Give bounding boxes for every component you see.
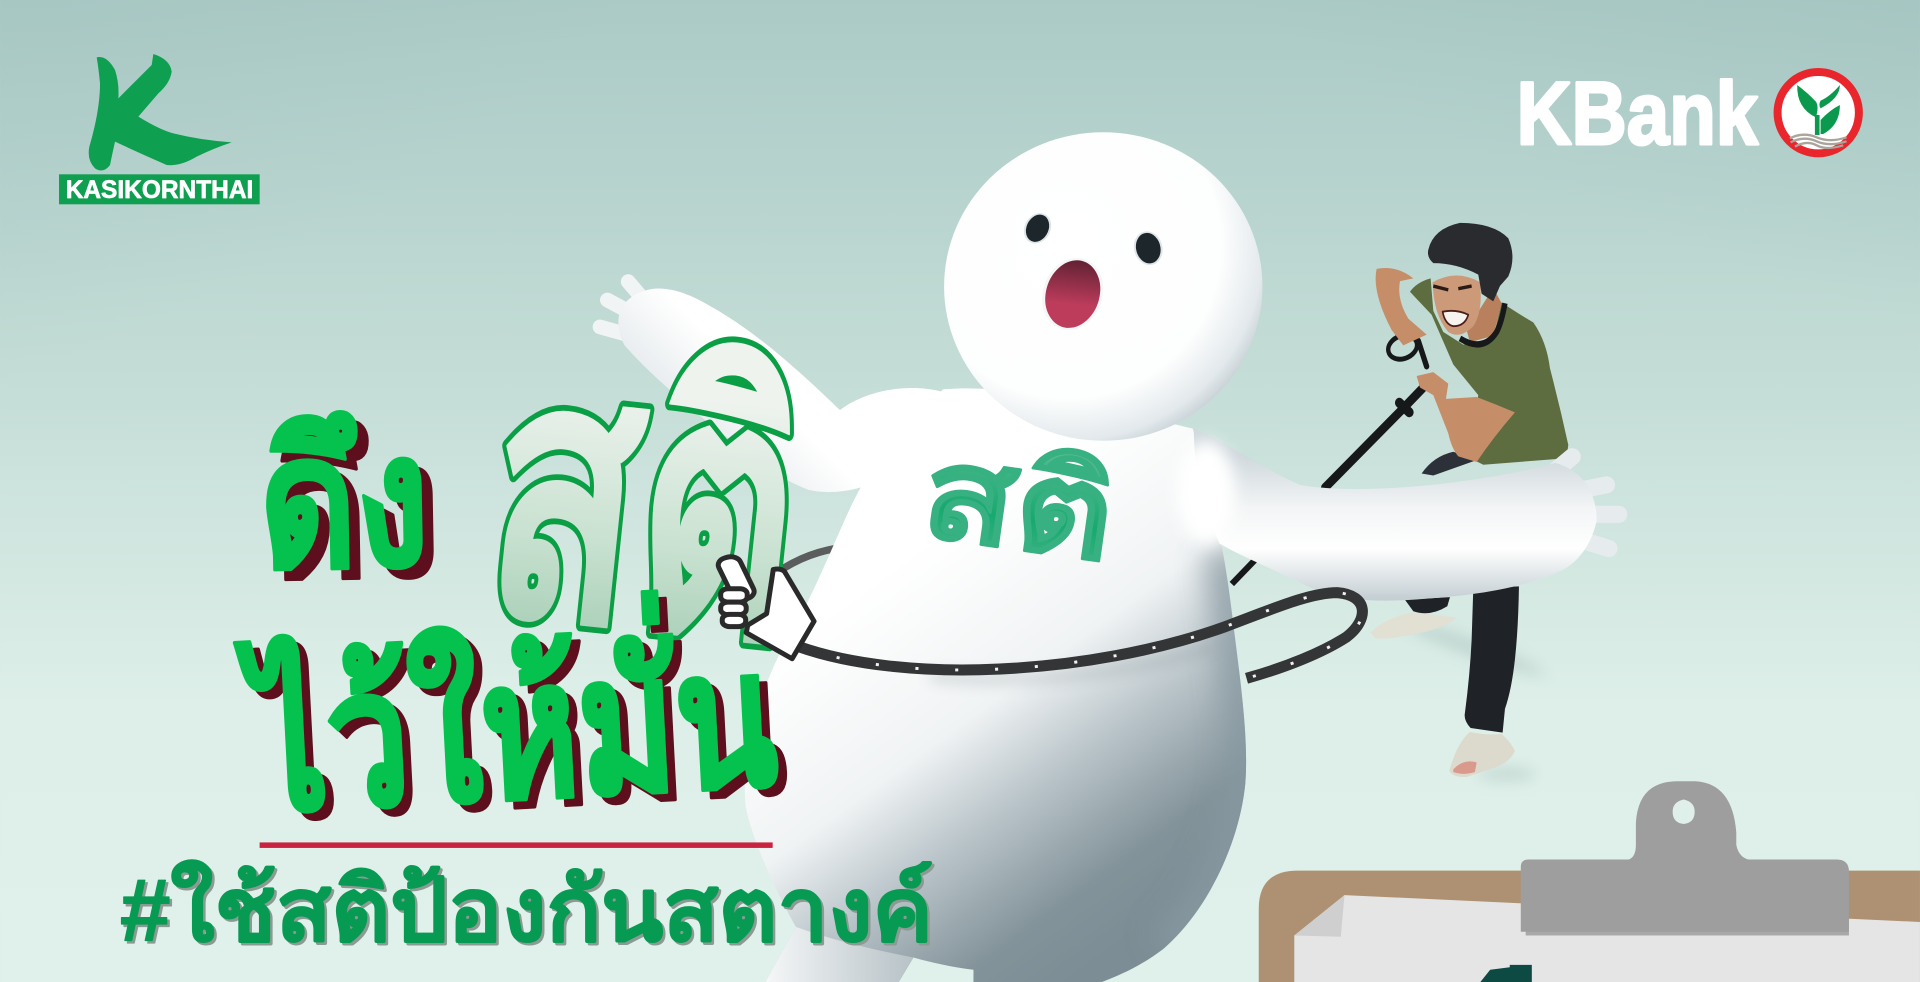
mascot: left leg — [765, 927, 913, 982]
man: shirt — [1410, 278, 1568, 465]
headline word: glossy สติ: สติ — [472, 290, 818, 716]
clipboard: clip shadow — [1526, 906, 1849, 935]
mascot: right eye — [1133, 231, 1164, 265]
logo: Kasikornthai: KASIKORNTHAI — [66, 177, 253, 204]
man: front slipper — [1449, 732, 1515, 777]
man: back slipper — [1371, 612, 1457, 639]
man: trousers — [1405, 452, 1519, 733]
mascot: shoulder highlight — [1177, 441, 1235, 544]
mascot: right arm — [1194, 429, 1597, 601]
man: arms — [1376, 268, 1515, 462]
man: collar — [1460, 303, 1505, 344]
man: hair — [1428, 223, 1512, 301]
man: toes — [1453, 761, 1477, 774]
headline word: ไว้ให้มั่น: ไว้ให้มั่น — [241, 593, 790, 860]
hand: palm and cuff — [746, 569, 814, 659]
hashtag: #ใช้สติป้องกันสตางค์ — [120, 859, 933, 959]
shadow under waist rope — [931, 647, 1212, 679]
mascot: left arm — [600, 282, 943, 492]
headline word: ดึง: ดึง — [258, 398, 430, 606]
rope around mascot waist — [798, 593, 1362, 678]
mascot: right hand fingers — [1550, 457, 1619, 549]
headline word: glossy สติ: สติ — [472, 290, 818, 716]
man: rope in hands — [1325, 332, 1430, 488]
logo: Kasikornthai — [59, 54, 260, 204]
clipboard: folded corner — [1294, 895, 1344, 937]
man: teeth — [1443, 311, 1468, 326]
clipboard: metal clip — [1521, 781, 1849, 932]
man: neck — [1467, 288, 1502, 342]
mascot: face — [1022, 212, 1164, 332]
clipboard: paper — [1294, 895, 1920, 982]
hand: fingers — [715, 555, 757, 627]
mascot: left eye — [1022, 212, 1054, 244]
logo: KBank: KBank — [1517, 63, 1759, 163]
clipboard: cut-off heading fragment — [1480, 965, 1532, 982]
mascot: body — [745, 388, 1248, 982]
mascot — [600, 132, 1619, 982]
rope behind mascot body — [776, 547, 1261, 584]
mascot: chest word: สติ — [914, 420, 1124, 588]
headline word: glossy สติ — [472, 290, 818, 716]
man: eyes — [1433, 286, 1472, 290]
clipboard: board — [1259, 871, 1920, 982]
mascot: mouth — [1038, 256, 1108, 332]
man: face — [1433, 276, 1481, 335]
clipboard — [1259, 781, 1920, 982]
mascot: head — [944, 132, 1262, 441]
ground shadows under man — [1404, 617, 1547, 780]
hashtag: #ใช้สติป้องกันสตางค์ — [122, 862, 936, 962]
man pulling the rope — [1325, 223, 1568, 777]
headline word: ดึง: ดึง — [269, 408, 441, 616]
red divider line — [260, 842, 773, 848]
cartoon hand holding the word — [715, 555, 814, 659]
headline word: ไว้ให้มั่น: ไว้ให้มั่น — [232, 585, 781, 852]
